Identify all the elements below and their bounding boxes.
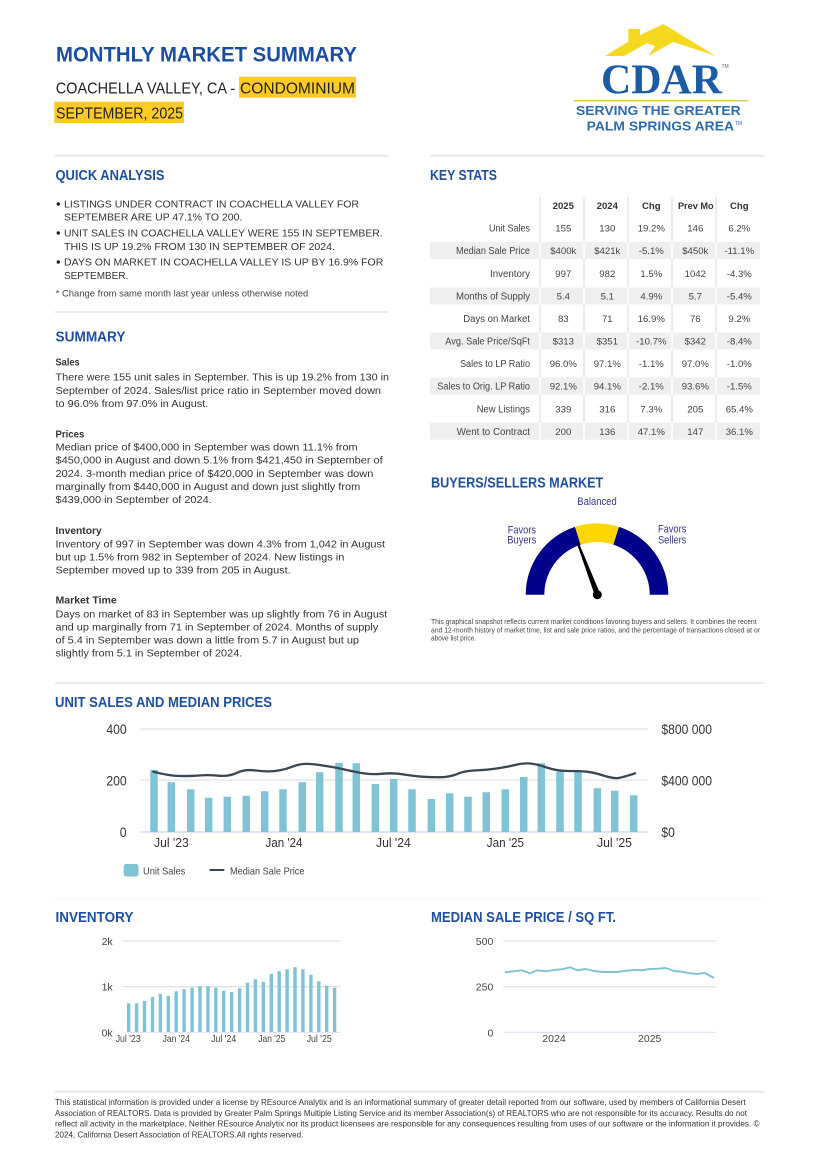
table: key stats: 76 xyxy=(690,314,701,325)
table: key stats: -4.3% xyxy=(727,269,752,280)
logo: CDAR: CDAR xyxy=(601,57,723,103)
legend: Median Sale Price xyxy=(230,866,305,878)
x axis labels: Jan '25 xyxy=(487,836,524,850)
bars: unit sales xyxy=(154,763,634,832)
bullet list: UNIT SALES IN COACHELLA VALLEY WERE 155 IN SEPTEMBER. xyxy=(64,228,383,240)
footer disclaimer: Association of REALTORS. Data is provided by Greater Palm Springs Multiple Listing Service and its member Association(s) of REALTORS who are not responsible for its accuracy. Results do not xyxy=(55,1108,748,1118)
table: key stats: Inventory xyxy=(490,269,530,280)
table: key stats: Sales to Orig. LP Ratio xyxy=(437,382,531,392)
bullet list: THIS IS UP 19.2% FROM 130 IN SEPTEMBER OF 2024. xyxy=(64,241,335,253)
text block: inventory: September moved up to 339 from 205 in August. xyxy=(56,565,291,577)
axis labels: 500 xyxy=(476,936,493,948)
table: key stats: 130 xyxy=(599,224,615,234)
panel: median sale price per square foot xyxy=(431,910,716,1045)
x axis labels xyxy=(154,836,632,850)
text block: inventory: but up 1.5% from 982 in September of 2024. New listings in xyxy=(56,551,344,563)
logo: CDAR: SERVING THE GREATER xyxy=(576,103,741,118)
axis labels: Jul '23 xyxy=(116,1033,141,1045)
text block: sales: September of 2024. Sales/list price ratio in September moved down xyxy=(56,385,381,397)
right axis labels xyxy=(661,721,712,840)
x axis labels: Jul '24 xyxy=(376,836,411,850)
table: key stats: -1.1% xyxy=(639,359,664,370)
gauge note xyxy=(431,619,761,643)
right axis labels: $800 000 xyxy=(661,721,712,737)
left axis labels: 0 xyxy=(120,824,127,840)
table: key stats: New Listings xyxy=(477,404,530,416)
table: key stats: 7.3% xyxy=(640,404,663,416)
table: key stats: 2024 xyxy=(597,201,619,212)
footnote: * Change from same month last year unless otherwise noted xyxy=(56,289,308,299)
text block: prices: Median price of $400,000 in September was down 11.1% from xyxy=(56,442,358,454)
table: key stats: 205 xyxy=(687,404,703,416)
table: key stats: 316 xyxy=(599,404,615,416)
table: key stats: 5.1 xyxy=(601,292,614,302)
axis labels: Jul '24 xyxy=(211,1033,236,1045)
panel: buyers/sellers market xyxy=(431,475,761,643)
bullet list: SEPTEMBER. xyxy=(64,270,128,282)
right axis labels: $400 000 xyxy=(661,772,712,788)
right axis labels: $0 xyxy=(661,824,675,840)
text block: market time: and up marginally from 71 in September of 2024. Months of supply xyxy=(56,621,379,633)
axis labels: 1k xyxy=(102,982,113,994)
legend xyxy=(124,864,305,878)
axis labels xyxy=(476,936,662,1045)
table: key stats: -1.5% xyxy=(727,382,752,392)
bullet list: LISTINGS UNDER CONTRACT IN COACHELLA VALLEY FOR xyxy=(64,199,359,211)
bar chart: inventory xyxy=(102,936,341,1045)
logo: CDAR xyxy=(574,24,748,134)
axis labels: 250 xyxy=(476,982,493,994)
subtitle: location and property type xyxy=(56,77,356,98)
axis labels xyxy=(102,936,332,1045)
table: key stats: 2025 xyxy=(553,201,575,212)
table: key stats: 36.1% xyxy=(726,427,753,438)
axis labels: Jan '24 xyxy=(163,1033,190,1045)
table: key stats: $450k xyxy=(682,246,709,257)
table: key stats: Chg xyxy=(642,201,661,212)
gauge labels xyxy=(507,496,687,547)
footer disclaimer: 2024, California Desert Association of REALTORS.All rights reserved. xyxy=(55,1129,303,1139)
table: key stats: 19.2% xyxy=(638,224,665,234)
text block: prices xyxy=(56,428,383,506)
logo: CDAR: TM xyxy=(735,121,742,127)
axis labels: Jul '25 xyxy=(307,1033,332,1045)
gauge labels: Favors xyxy=(508,524,536,536)
text block: sales: Sales xyxy=(56,357,80,369)
table: key stats xyxy=(430,197,760,440)
text block: prices: marginally from $440,000 in August and down just slightly from xyxy=(56,481,361,493)
table: key stats: -5.4% xyxy=(727,292,752,302)
gauge labels: Buyers xyxy=(507,535,537,547)
table: key stats: $342 xyxy=(685,336,706,348)
footer disclaimer: This statistical information is provided under a license by REsource Analytix and is an informational summary of greater detail reported from our software, used by members of California Desert xyxy=(55,1097,746,1107)
table: key stats: Chg xyxy=(730,201,749,212)
text block: market time: Days on market of 83 in September was up slightly from 76 in August xyxy=(56,608,387,620)
table: key stats: Days on Market xyxy=(463,314,530,325)
table: key stats: Median Sale Price xyxy=(456,246,531,257)
text block: inventory: Inventory xyxy=(56,525,102,537)
logo: CDAR: TM xyxy=(722,64,729,70)
line chart: price per square foot xyxy=(476,936,716,1045)
text block: market time xyxy=(56,595,387,660)
table: key stats: 6.2% xyxy=(728,224,751,234)
left axis labels: 400 xyxy=(106,721,127,737)
axis labels: 0k xyxy=(102,1028,113,1040)
table: key stats: 136 xyxy=(599,427,615,438)
panel: unit sales and median prices xyxy=(55,695,712,878)
axis labels: 2025 xyxy=(638,1033,662,1045)
axis labels: 0 xyxy=(487,1028,493,1040)
panel: summary xyxy=(56,329,389,660)
table: key stats: 71 xyxy=(602,314,613,325)
table: key stats: 997 xyxy=(555,269,571,280)
table: key stats: -5.1% xyxy=(639,246,664,257)
table: key stats: 5.7 xyxy=(689,292,702,302)
heading: unit sales and median prices: UNIT SALES AND MEDIAN PRICES xyxy=(55,695,272,711)
table: key stats: 94.1% xyxy=(594,382,621,392)
table: key stats: Months of Supply xyxy=(456,292,530,302)
left axis labels xyxy=(106,721,127,840)
header: title block xyxy=(54,44,357,123)
table: key stats: -10.7% xyxy=(636,336,667,348)
bullet list: DAYS ON MARKET IN COACHELLA VALLEY IS UP BY 16.9% FOR xyxy=(64,257,384,269)
bullet list: SEPTEMBER ARE UP 47.1% TO 200. xyxy=(64,212,242,224)
heading: quick analysis: QUICK ANALYSIS xyxy=(56,168,165,184)
text block: sales xyxy=(56,357,389,410)
heading: inventory: INVENTORY xyxy=(56,910,134,926)
gauge labels: Sellers xyxy=(658,534,687,546)
x axis labels: Jul '23 xyxy=(154,836,189,850)
left axis labels: 200 xyxy=(106,772,127,788)
table: key stats: 97.0% xyxy=(682,359,709,370)
table: key stats: 146 xyxy=(687,224,703,234)
text block: inventory: Inventory of 997 in September was down 4.3% from 1,042 in August xyxy=(56,538,385,550)
panel: inventory xyxy=(56,910,341,1045)
text block: prices: Prices xyxy=(56,428,84,440)
text block: market time: slightly from 5.1 in September of 2024. xyxy=(56,648,242,660)
heading: median sale price / sq ft: MEDIAN SALE PRICE / SQ FT. xyxy=(431,910,616,926)
table: key stats: 83 xyxy=(558,314,569,325)
table: key stats: 16.9% xyxy=(638,314,665,325)
table: key stats: 97.1% xyxy=(594,359,621,370)
axis labels: 2024 xyxy=(542,1033,566,1045)
text block: prices: $439,000 in September of 2024. xyxy=(56,494,212,506)
gauge labels: Favors xyxy=(658,524,687,536)
axis labels: Jan '25 xyxy=(258,1033,285,1045)
table: key stats: 147 xyxy=(687,427,703,438)
footer disclaimer: reflect all activity in the marketplace. Neither REsource Analytix nor its product licensees are responsible for any consequences resulting from uses of our software or the information it provides. © xyxy=(55,1119,760,1129)
table: key stats: 9.2% xyxy=(728,314,751,325)
gauge note: and 12-month history of market time, list and sale price ratios, and the percentage of transactions closed at or xyxy=(431,627,761,634)
x axis labels: Jul '25 xyxy=(597,836,632,850)
gauge note: This graphical snapshot reflects current market conditions favoring buyers and sellers. It combines the recent xyxy=(431,619,757,626)
subtitle: location and property type: COACHELLA VALLEY, CA - xyxy=(56,80,235,97)
table: key stats: $400k xyxy=(550,246,577,257)
panel: key stats xyxy=(430,168,760,440)
text block: market time: of 5.4 in September was down a little from 5.7 in August but up xyxy=(56,635,359,647)
x axis labels: Jan '24 xyxy=(266,836,302,850)
table: key stats: 1.5% xyxy=(640,269,663,280)
table: key stats: 982 xyxy=(599,269,615,280)
heading: key stats: KEY STATS xyxy=(430,168,497,184)
footer disclaimer xyxy=(55,1097,760,1139)
table: key stats: 5.4 xyxy=(557,292,571,302)
table: key stats: Went to Contract xyxy=(457,427,530,438)
heading: buyers/sellers market: BUYERS/SELLERS MARKET xyxy=(431,475,603,491)
text block: sales: There were 155 unit sales in September. This is up 19.2% from 130 in xyxy=(56,372,389,384)
table: key stats: 339 xyxy=(555,404,571,416)
line: median sale price xyxy=(153,763,635,778)
table: key stats: 93.6% xyxy=(682,382,709,392)
text block: inventory xyxy=(56,525,385,577)
table: key stats: -1.0% xyxy=(727,359,752,370)
bullet list xyxy=(57,199,384,282)
gauge labels: Balanced xyxy=(577,496,617,508)
table: key stats: 47.1% xyxy=(638,427,665,438)
table: key stats: 200 xyxy=(555,427,571,438)
table: key stats: 92.1% xyxy=(550,382,577,392)
subtitle: location and property type: CONDOMINIUM xyxy=(240,80,355,97)
table: key stats: Avg. Sale Price/SqFt xyxy=(445,336,530,348)
table: key stats: $313 xyxy=(553,336,574,348)
panel: quick analysis xyxy=(56,168,384,299)
combo chart xyxy=(106,721,712,850)
text block: prices: 2024. 3-month median price of $420,000 in September was down xyxy=(56,468,373,480)
table: key stats: -2.1% xyxy=(639,382,664,392)
table: key stats: Prev Mo xyxy=(678,201,714,212)
gauge xyxy=(526,523,668,599)
table: key stats: 4.9% xyxy=(640,292,663,302)
table: key stats: 1042 xyxy=(685,269,706,280)
table: key stats: -11.1% xyxy=(724,246,755,257)
table: key stats: Unit Sales xyxy=(489,224,530,234)
table: key stats: 96.0% xyxy=(550,359,577,370)
table: key stats: -8.4% xyxy=(727,336,752,348)
heading: summary: SUMMARY xyxy=(56,329,126,345)
table: key stats: 155 xyxy=(555,224,571,234)
axis labels: 2k xyxy=(102,936,113,948)
text block: prices: $450,000 in August and down 5.1% from $421,450 in September of xyxy=(56,455,383,467)
table: key stats: 65.4% xyxy=(726,404,753,416)
text block: market time: Market Time xyxy=(56,595,117,607)
subtitle: date: SEPTEMBER, 2025 xyxy=(56,105,183,122)
gauge note: above list price. xyxy=(431,636,476,643)
gauge needle xyxy=(576,541,602,599)
logo: CDAR: PALM SPRINGS AREA xyxy=(587,119,735,134)
table: key stats: $421k xyxy=(594,246,621,257)
table: key stats: Sales to LP Ratio xyxy=(460,359,530,370)
title: MONTHLY MARKET SUMMARY xyxy=(56,44,357,67)
legend: Unit Sales xyxy=(143,866,185,878)
text block: sales: to 96.0% from 97.0% in August. xyxy=(56,398,208,410)
table: key stats: $351 xyxy=(597,336,618,348)
